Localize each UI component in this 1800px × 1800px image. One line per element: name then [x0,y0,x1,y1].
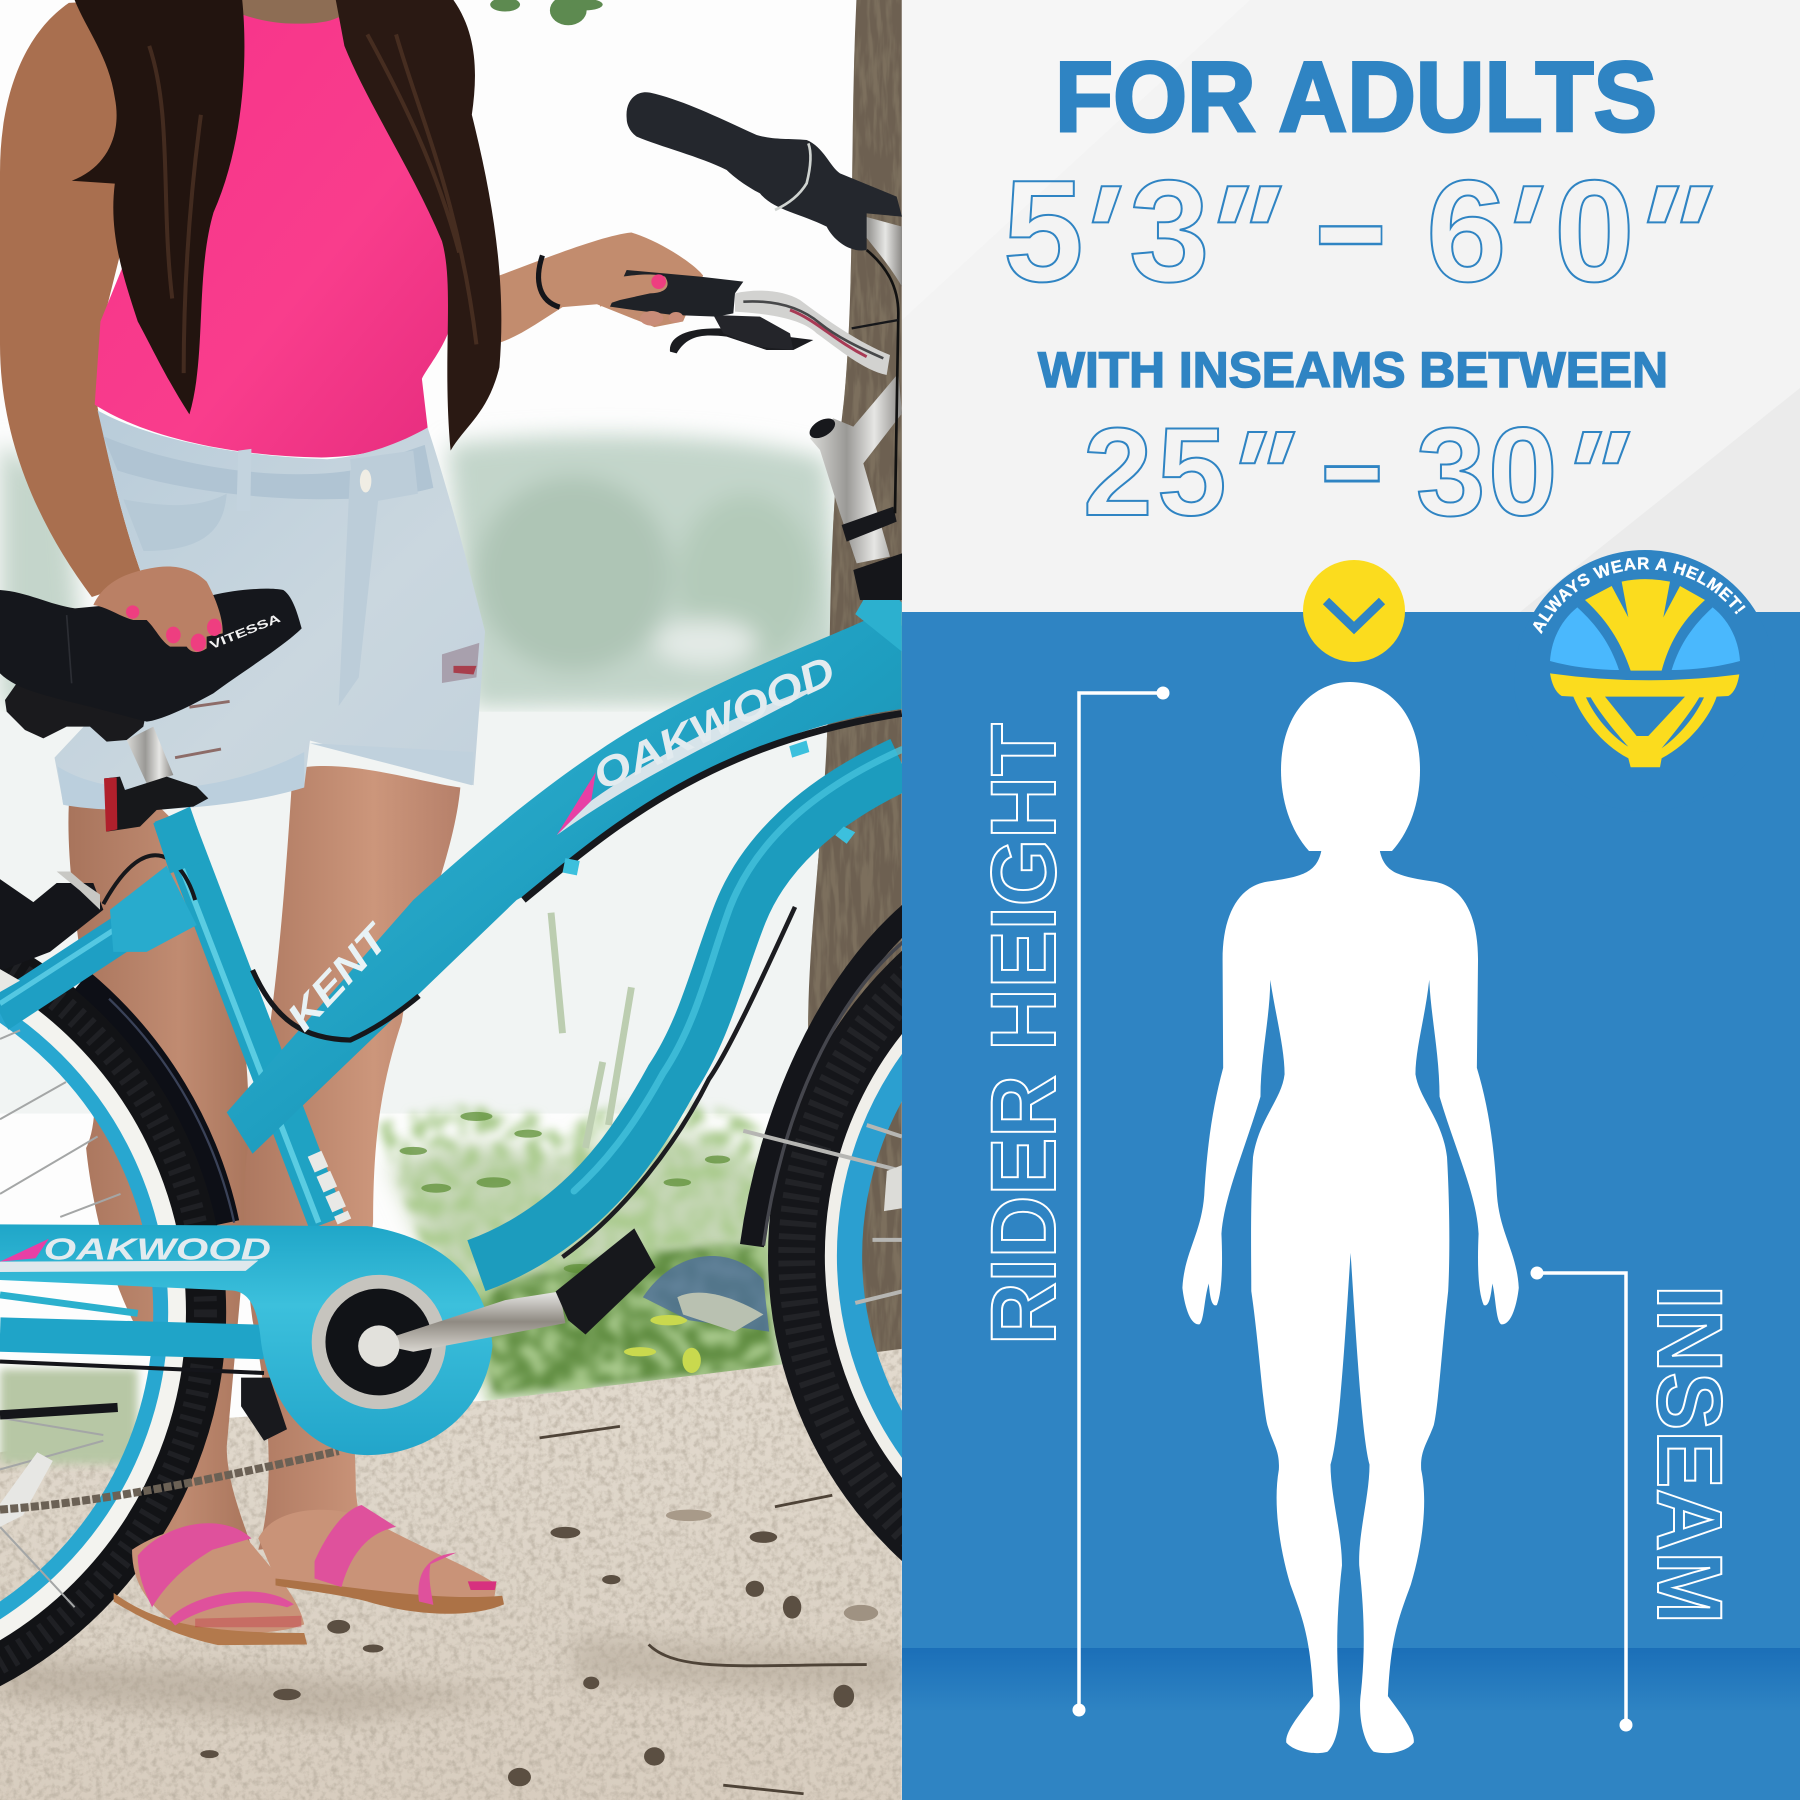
inseam range: – [1322,382,1382,545]
right foot and sandal [258,1505,504,1614]
panel: light header background [902,0,1800,612]
yellow chevron badge [1303,560,1405,662]
chain guard OAKWOOD logo: OAKWOOD [44,1231,271,1266]
heading: for adults: FOR ADULTS [1055,41,1657,152]
photo: woman with teal cruiser bike [0,0,902,1800]
rider height range: 0 [1554,150,1635,312]
saddle springs [5,683,147,742]
inseam label: INSEAM [1638,1285,1740,1624]
front leg [244,766,460,1550]
top tube OAKWOOD logo: OAKWOOD [586,647,842,799]
rider height range: 5 [1003,150,1084,312]
figure silhouette [1182,682,1519,1753]
top tube pink accent [557,772,596,835]
rider height range: ' [1491,154,1547,317]
chain guard [0,1224,492,1455]
pedal [556,1228,656,1335]
helmet badge curved text: ALWAYS WEAR A HELMET! [1533,557,1746,634]
inseam range: " [1552,405,1633,545]
inseam range: 2 [1083,403,1153,542]
saddle brand text: VITESSA [208,611,283,652]
KENT logo: KENT [279,915,399,1039]
rider height range [1003,122,1716,321]
rider height range: " [1192,154,1285,317]
chain guard pink accent [0,1239,49,1262]
seat stay and rear brake [0,866,197,1013]
pink nails [126,605,222,652]
bicycle frame [0,574,902,1455]
rider height range: – [1316,122,1385,321]
inseam range: " [1217,405,1298,545]
top tube logo swoosh [557,690,808,835]
inseam range: 5 [1157,403,1227,542]
crank arm [373,1292,565,1352]
pink tank top [95,10,456,457]
hand on saddle [93,566,223,652]
denim shorts [55,410,485,810]
rider height label: RIDER HEIGHT [973,723,1075,1345]
saddle [0,589,302,722]
chain stay cable [0,1362,264,1373]
long dark hair [72,0,501,451]
back leg [68,804,253,1550]
black derailleur [241,1378,287,1441]
rider height range: 6 [1426,150,1507,312]
lake water [0,712,861,1114]
left foot and sandal [114,1523,307,1645]
rear lower tube [0,1335,264,1342]
inseam bracket [1530,1266,1632,1732]
wristband [539,255,560,307]
seat clamp and reflector [105,777,208,832]
bicycle saddle, seat post and hand [0,566,302,873]
right bicycle wheel [740,905,902,1561]
neck [218,0,350,34]
rider height range: 3 [1129,150,1210,312]
bicycle chain [0,1451,339,1510]
teal seat tube top [153,807,208,873]
plants behind bike [344,913,804,1412]
right arm and hand [494,232,703,344]
green behind left wheel spokes [0,1369,138,1464]
icon: helmet badge [1533,550,1756,768]
leaves at top of frame [490,0,603,25]
left arm [0,0,144,597]
inseam range: 3 [1416,403,1486,542]
subheading: with inseams between: WITH INSEAMS BETWEEN [1038,342,1668,398]
sandy ground [0,1343,902,1800]
chain guard logo swoosh [0,1261,258,1272]
rider height range: ' [1069,154,1125,317]
chain ring [319,1282,439,1402]
chrome seat post [127,727,173,783]
rider height bracket [1072,686,1170,1716]
inseam range: 0 [1488,403,1558,542]
left reflector [0,1452,53,1527]
left bicycle wheel [0,910,234,1714]
inseam range [1083,382,1633,545]
tree trunk [808,0,902,1378]
hazy treeline [0,435,844,709]
handlebars, grips and chrome stem [600,92,902,600]
panel: blue figure background [902,612,1800,1800]
rider height range: " [1621,154,1716,317]
